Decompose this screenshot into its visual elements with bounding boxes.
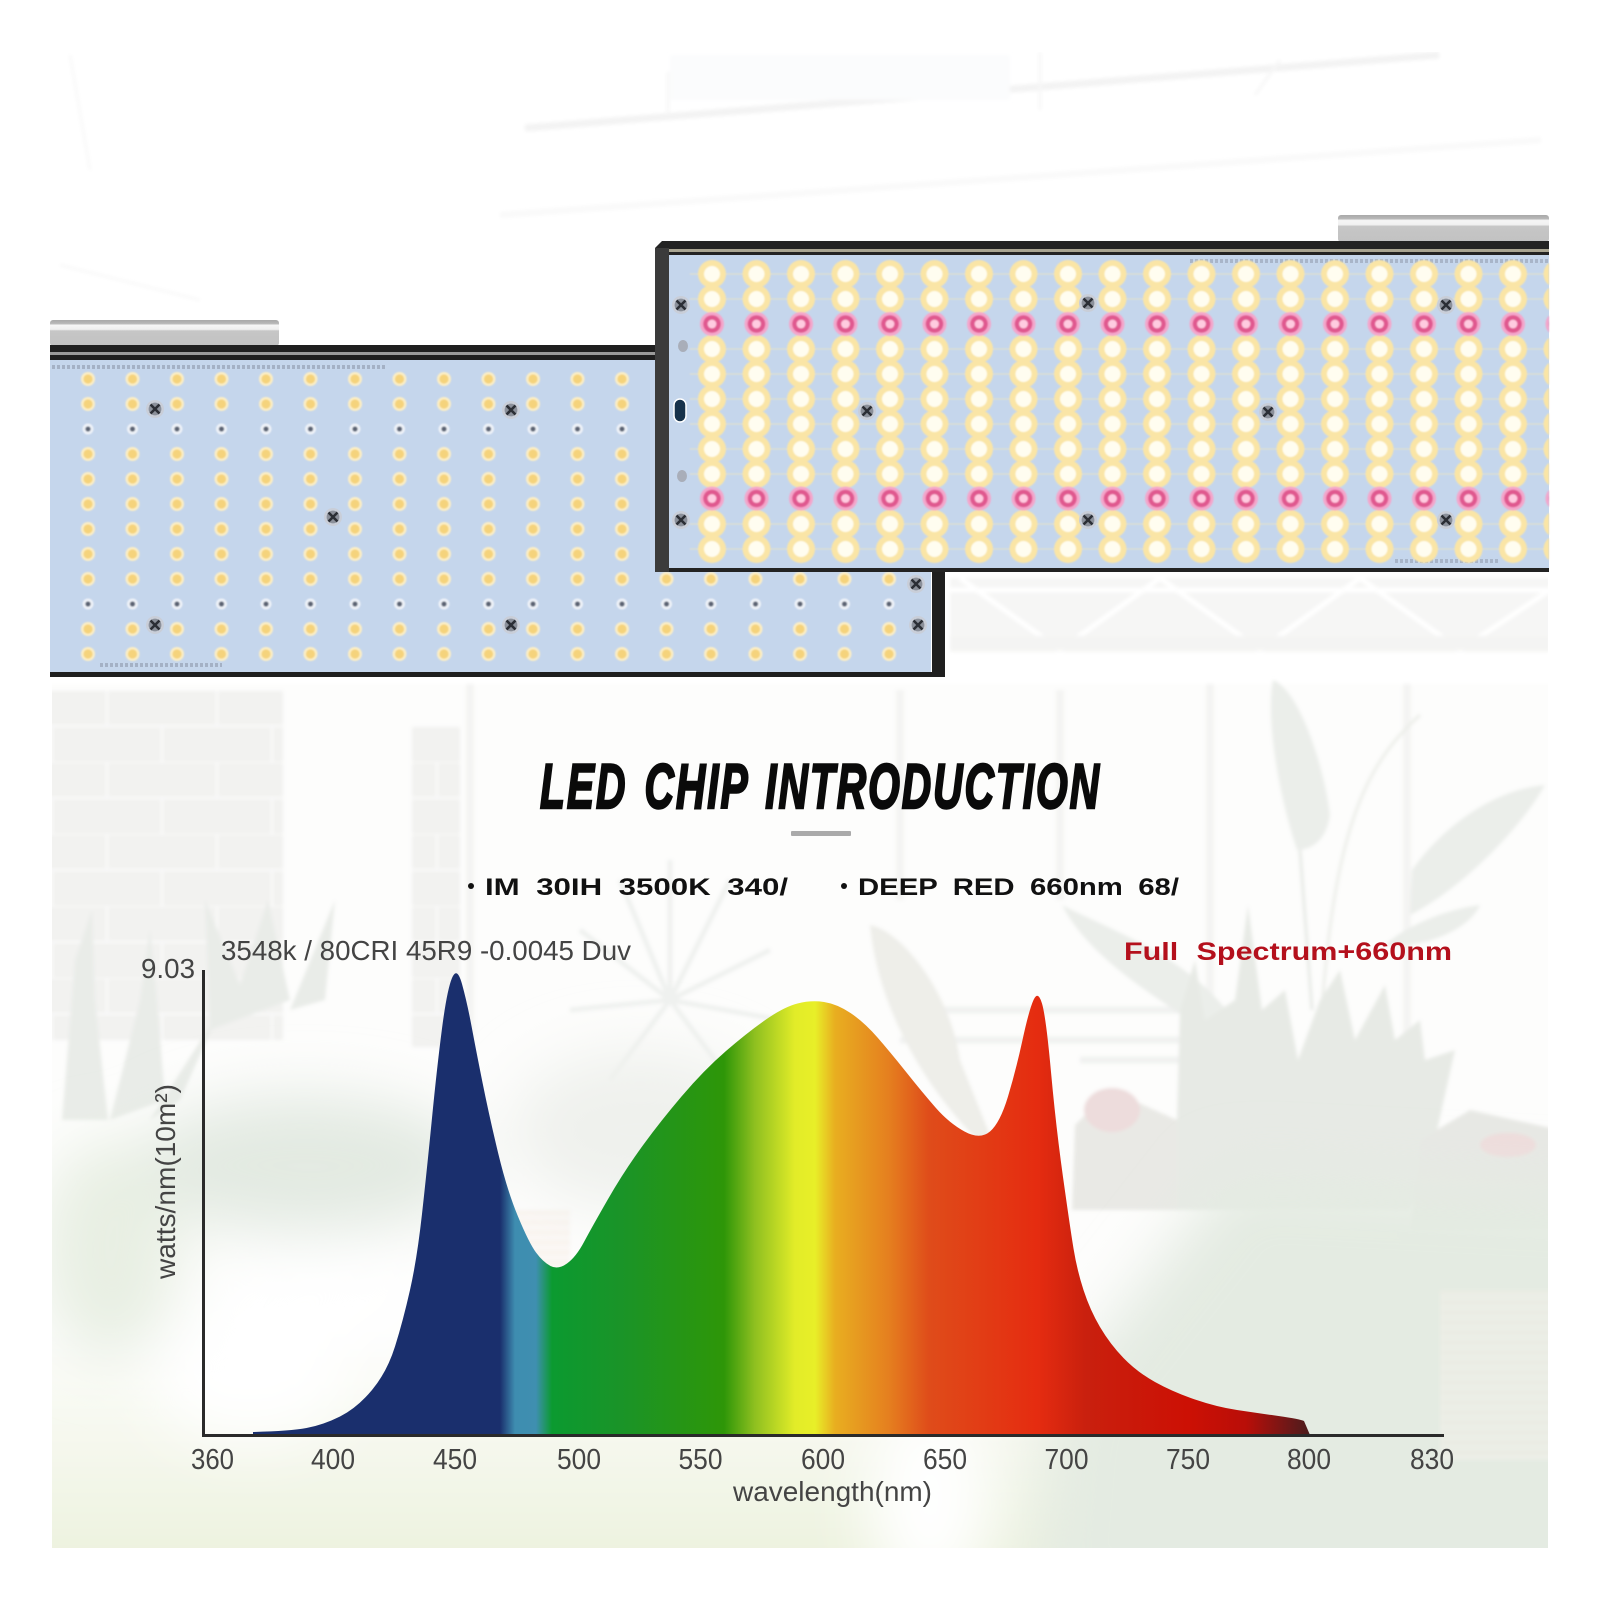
background: bottom green wash xyxy=(52,1395,1054,1548)
bullet: deep red chips: DEEP RED 660nm 68/ xyxy=(858,874,1179,901)
hanging bar: rear panel xyxy=(50,320,279,346)
x axis tick labels: 830 xyxy=(1410,1444,1454,1476)
x axis tick labels: 500 xyxy=(557,1444,601,1476)
background: snake plants xyxy=(1175,905,1455,1210)
panel: rear LED board (small chips) xyxy=(50,320,945,677)
x axis tick labels: 800 xyxy=(1287,1444,1331,1476)
board print marks xyxy=(1190,261,1549,561)
screws: rear panel xyxy=(146,400,927,634)
frame: front panel xyxy=(655,241,1549,572)
x axis tick labels: 450 xyxy=(433,1444,477,1476)
x axis tick labels: 400 xyxy=(311,1444,355,1476)
background: caladium left xyxy=(1072,1088,1177,1210)
background: brick wall left xyxy=(40,690,460,1047)
background: roof beams xyxy=(526,52,1438,130)
hanging bar: front panel xyxy=(1338,215,1549,242)
background: truss under the large panel xyxy=(950,578,1550,652)
background: lower scene wash xyxy=(40,684,1560,1564)
background: peach blind stripes xyxy=(516,1211,569,1266)
panel: front LED board (large chips) xyxy=(655,215,1549,572)
background: hazy greenery xyxy=(52,1055,1548,1548)
background: lower scene xyxy=(40,680,1580,1564)
x axis label: wavelength(nm) xyxy=(732,1476,932,1507)
x axis tick labels: 550 xyxy=(678,1444,722,1476)
x axis tick labels: 750 xyxy=(1166,1444,1210,1476)
small marks: front panel xyxy=(677,340,688,482)
background: planter xyxy=(1400,1232,1560,1272)
background: centre palm xyxy=(571,861,770,1050)
spectrum curve xyxy=(253,973,1310,1435)
x axis tick labels: 700 xyxy=(1044,1444,1088,1476)
title: LED CHIP INTRODUCTION xyxy=(540,752,1101,822)
board surface xyxy=(50,360,931,672)
LED array: small chips xyxy=(66,367,911,667)
axes xyxy=(204,970,1444,1436)
background: large leaves right xyxy=(1062,680,1545,1040)
title underline xyxy=(791,831,851,836)
screws: front panel xyxy=(672,294,1455,529)
spectrum label: Full Spectrum+660nm xyxy=(1124,938,1452,966)
background: feather leaf centre right xyxy=(870,926,989,1136)
LED array: large chips with deep red rows xyxy=(690,255,1549,568)
background: window frames xyxy=(468,687,1409,1028)
background: left plants xyxy=(62,900,335,1120)
board print marks xyxy=(52,367,385,665)
background: peach stripes over haze xyxy=(1440,1290,1560,1460)
spectrum chart xyxy=(141,935,1454,1507)
mounting slot xyxy=(674,399,686,422)
background: caladium right xyxy=(1420,1110,1548,1198)
background: window rails xyxy=(900,1010,1200,1060)
x axis tick labels: 650 xyxy=(923,1444,967,1476)
x axis tick labels: 600 xyxy=(801,1444,845,1476)
x axis tick labels: 360 xyxy=(191,1444,234,1476)
y axis maximum: 9.03 xyxy=(141,953,195,984)
chart subtitle: 3548k / 80CRI 45R9 -0.0045 Duv xyxy=(221,935,631,966)
y axis label: watts/nm(10m²) xyxy=(150,1084,181,1280)
x axis tick labels xyxy=(191,1444,1454,1476)
frame: rear panel xyxy=(50,345,945,677)
board surface xyxy=(669,255,1549,568)
bullet: IM 301H chips: IM 30IH 3500K 340/ xyxy=(485,874,788,901)
